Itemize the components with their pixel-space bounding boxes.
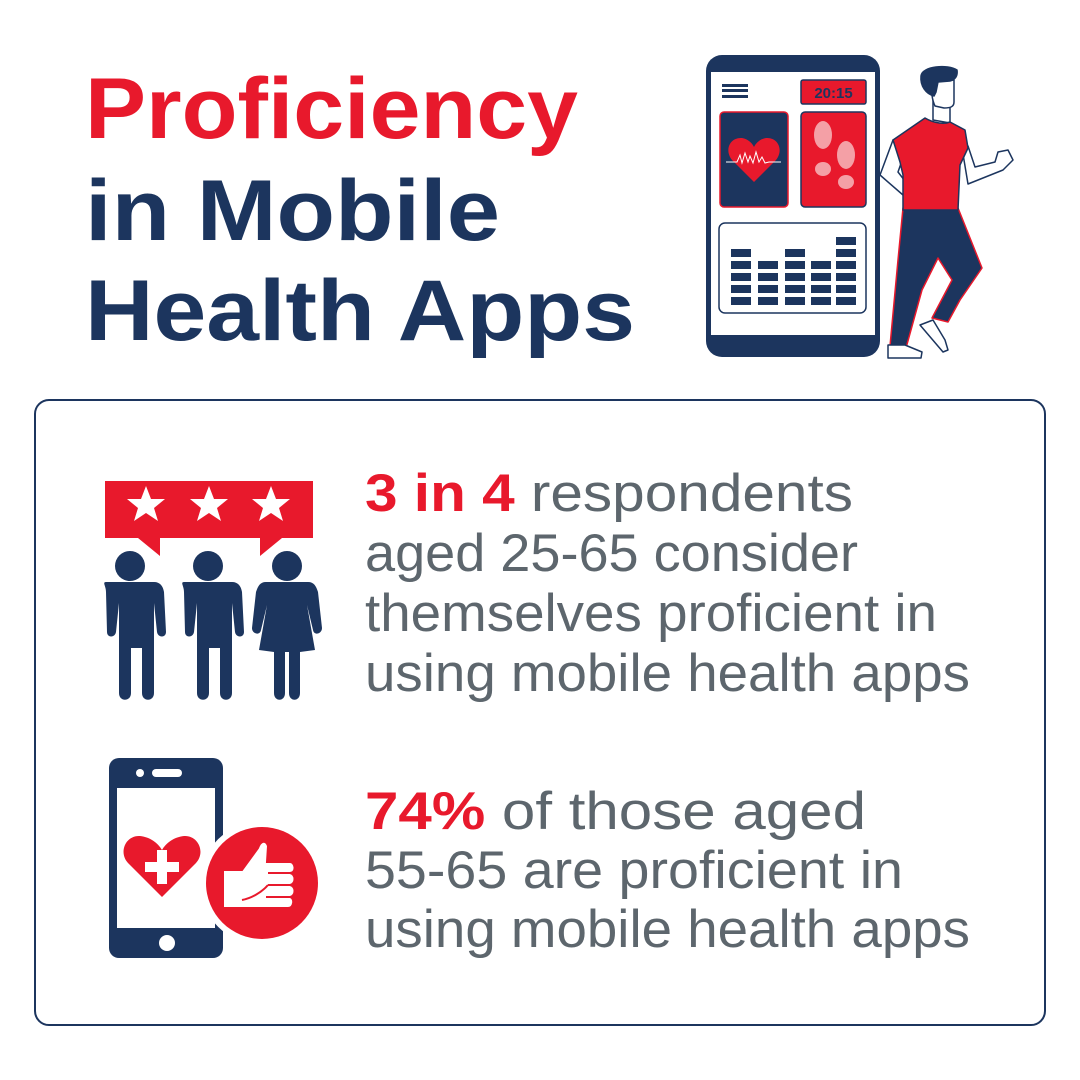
title: Health Apps <box>85 263 635 359</box>
illustration: phone with health app <box>706 55 880 357</box>
illustration: running man <box>880 67 1013 358</box>
icon: rating people <box>104 481 322 700</box>
icon: phone with heart and thumbs up <box>109 758 324 958</box>
stat 1 text: aged 25-65 consider <box>365 524 858 583</box>
stat 1 text: themselves proficient in <box>365 584 937 643</box>
stat 2 text <box>365 782 970 959</box>
stat 2 text: 74% of those aged <box>365 782 866 841</box>
title: Proficiency <box>85 61 578 157</box>
time display: 20:15 <box>814 85 853 102</box>
title <box>85 61 635 359</box>
stat 2 text: using mobile health apps <box>365 900 970 959</box>
panel: stats box <box>35 400 1045 1025</box>
steps panel <box>801 112 866 207</box>
time display <box>801 80 866 104</box>
heart rate panel <box>720 112 788 207</box>
stat 1 text: using mobile health apps <box>365 644 970 703</box>
title: in Mobile <box>85 163 500 259</box>
bar chart panel <box>719 223 866 313</box>
icon: menu <box>722 84 748 98</box>
stat 2 text: 55-65 are proficient in <box>365 841 903 900</box>
stat 1 text <box>365 464 970 703</box>
stat 1 text: 3 in 4 respondents <box>365 464 853 523</box>
